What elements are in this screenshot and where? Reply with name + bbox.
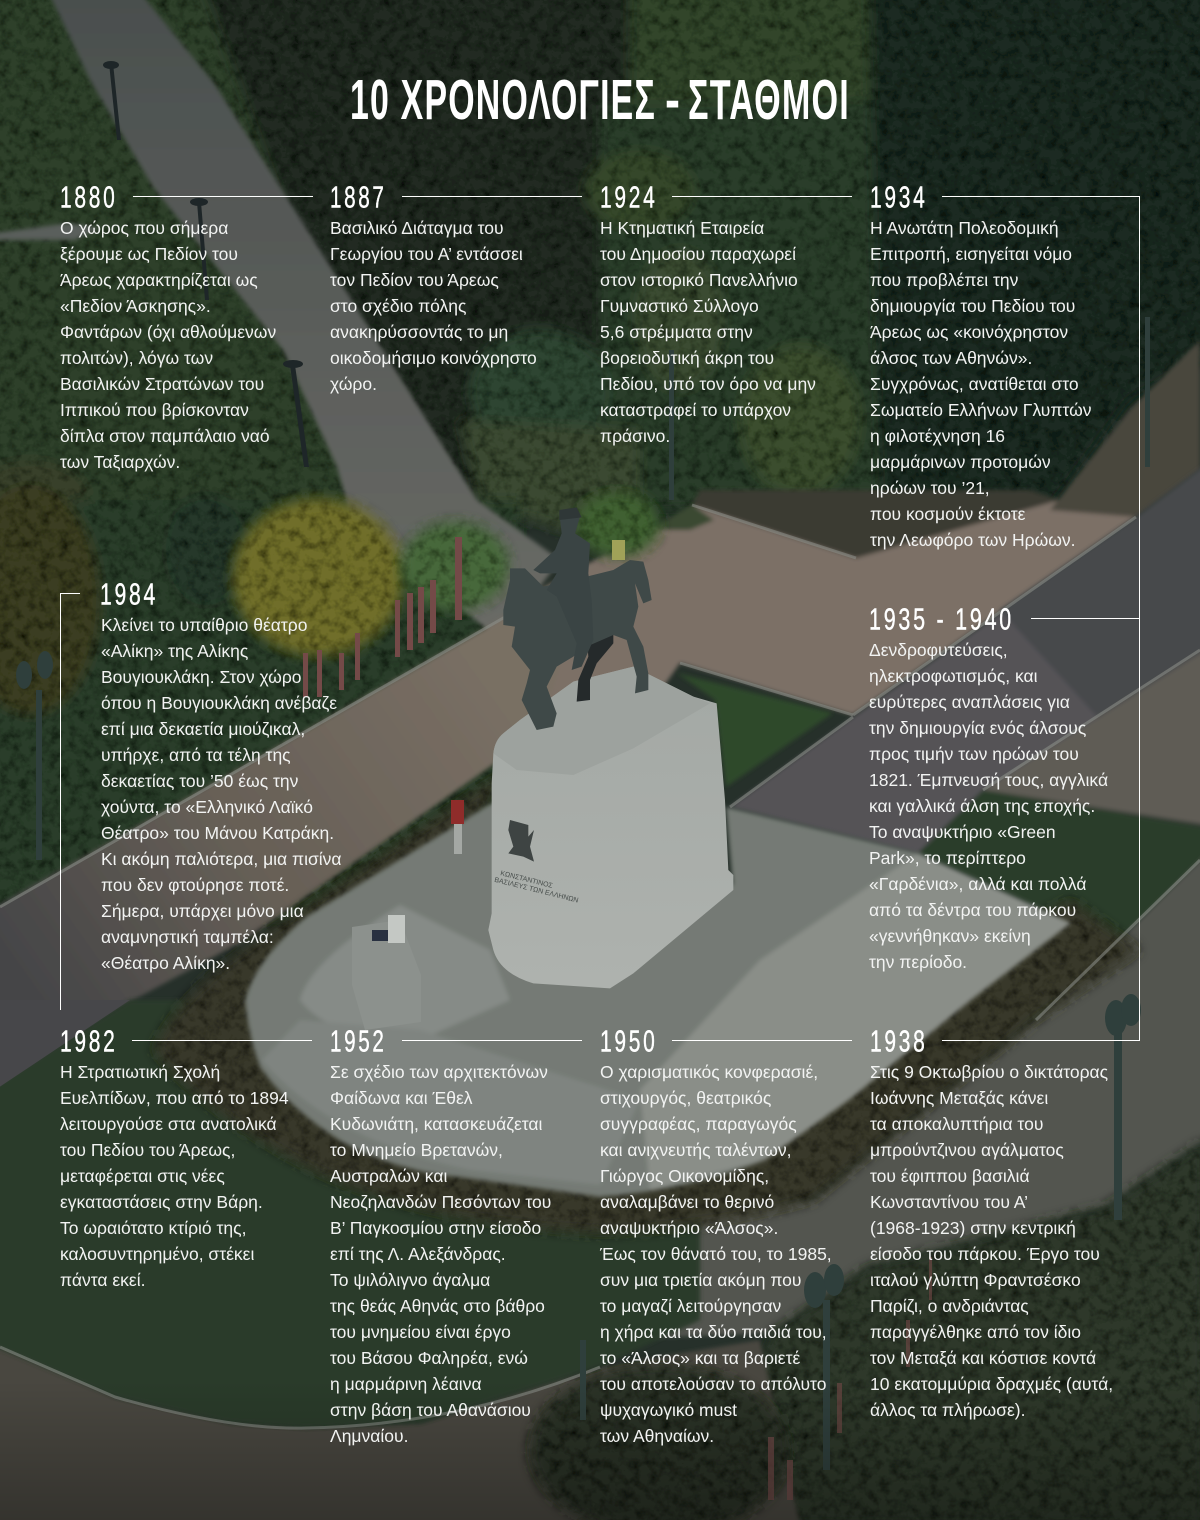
text: 1934: η φιλοτέχνηση 16 bbox=[870, 426, 1005, 446]
panel: 1924 bbox=[600, 180, 852, 446]
text: 1935 - 1940: Park», το περίπτερο bbox=[869, 848, 1026, 868]
text: 1950: το «Άλσος» και τα βαριετέ bbox=[600, 1348, 800, 1368]
emblem on plinth bbox=[508, 820, 534, 862]
equestrian statue bbox=[503, 507, 652, 730]
text: 1924 bbox=[600, 218, 816, 446]
text: 1950: των Αθηναίων. bbox=[600, 1426, 714, 1446]
text: 1887: Γεωργίου του Α’ εντάσσει bbox=[330, 244, 523, 264]
text: 1984: όπου η Βουγιουκλάκη ανέβαζε bbox=[101, 693, 337, 713]
panel: 1887 bbox=[330, 180, 582, 394]
text: 1924: Πεδίου, υπό τον όρο να μην bbox=[600, 374, 816, 394]
stone block with seated figures bbox=[352, 920, 421, 1030]
text: 1924: καταστραφεί το υπάρχον bbox=[600, 400, 791, 420]
text: 1982: Ευελπίδων, που από το 1894 bbox=[60, 1088, 289, 1108]
people on the plaza bbox=[372, 540, 625, 943]
title: ΣΤΑΘΜΟΙ bbox=[688, 68, 850, 132]
title: - bbox=[665, 68, 680, 132]
connector line bbox=[942, 1040, 1140, 1041]
text: 1887: στο σχέδιο πόλης bbox=[330, 296, 466, 316]
text: 1982: του Πεδίου του Άρεως, bbox=[60, 1140, 235, 1160]
text: 1982: Το ωραιότατο κτίριό της, bbox=[60, 1218, 246, 1238]
text: 1934: Συγχρόνως, ανατίθεται στο bbox=[870, 374, 1079, 394]
text: 1984: επί μια δεκαετία μιούζικαλ, bbox=[101, 719, 305, 739]
text: 1984: Σήμερα, υπάρχει μόνο μια bbox=[101, 901, 304, 921]
text: 1952: επί της Λ. Αλεξάνδρας. bbox=[330, 1244, 506, 1264]
green bushes bbox=[401, 493, 660, 610]
text: 1952 bbox=[330, 1062, 551, 1446]
text: 1880 bbox=[60, 218, 276, 472]
panel: 1938 bbox=[870, 1024, 1139, 1420]
text: 1952: η μαρμάρινη λέαινα bbox=[330, 1374, 482, 1394]
text: 1938: Ιωάννης Μεταξάς κάνει bbox=[870, 1088, 1048, 1108]
text: 1952: Φαίδωνα και Έθελ bbox=[330, 1088, 473, 1108]
text: 1950: ψυχαγωγικό must bbox=[600, 1400, 737, 1420]
year: 1880: 1880 bbox=[60, 180, 118, 214]
text: 1982: εγκαταστάσεις στην Βάρη. bbox=[60, 1192, 263, 1212]
text: 1950: συγγραφέας, παραγωγός bbox=[600, 1114, 797, 1134]
text: 1934: δημιουργία του Πεδίου του bbox=[870, 296, 1075, 316]
text: 1982 bbox=[60, 1062, 289, 1290]
text: 1934: μαρμάρινων προτομών bbox=[870, 452, 1051, 472]
year: 1924: 1924 bbox=[600, 180, 658, 214]
text: 1984: δεκαετίας του ’50 έως την bbox=[101, 771, 298, 791]
text: 1934 bbox=[870, 218, 1092, 550]
text: 1935 - 1940: 1821. Έμπνευσή τους, αγγλικά bbox=[869, 770, 1108, 790]
text: 1934: που κοσμούν έκτοτε bbox=[870, 504, 1025, 524]
text: 1887 bbox=[330, 218, 537, 394]
lower walkway bbox=[590, 855, 1200, 1340]
panel: 1880 bbox=[60, 180, 313, 472]
text: 1984 bbox=[101, 615, 342, 973]
year: 1938: 1938 bbox=[870, 1024, 928, 1058]
text: 1934: άλσος των Αθηνών». bbox=[870, 348, 1032, 368]
year: 1935 - 1940: 1935 - 1940 bbox=[869, 602, 1014, 636]
text: 1880: δίπλα στον παμπάλαιο ναό bbox=[60, 426, 270, 446]
text: 1950: αναλαμβάνει το θερινό bbox=[600, 1192, 774, 1212]
text: 1952: Β’ Παγκοσμίου στην είσοδο bbox=[330, 1218, 541, 1238]
text: 1935 - 1940: την περίοδο. bbox=[869, 952, 967, 972]
connector line bbox=[402, 196, 582, 197]
grass wedge beside the plinth bbox=[677, 673, 833, 787]
text: 1982: πάντα εκεί. bbox=[60, 1270, 145, 1290]
flower strip around the plaza bbox=[153, 770, 1140, 1233]
text: 1880: «Πεδίον Άσκησης». bbox=[60, 296, 211, 316]
text: 1887: οικοδομήσιμο κοινόχρηστο bbox=[330, 348, 537, 368]
text: 1935 - 1940: «Γαρδένια», αλλά και πολλά bbox=[869, 874, 1087, 894]
text: 1924: πράσινο. bbox=[600, 426, 670, 446]
text: 1952: Κυδωνιάτη, κατασκευάζεται bbox=[330, 1114, 542, 1134]
text: 1938: Στις 9 Οκτωβρίου ο δικτάτορας bbox=[870, 1062, 1108, 1082]
connector line bbox=[132, 1040, 312, 1041]
text: 1952: του μνημείου είναι έργο bbox=[330, 1322, 511, 1342]
text: 1938 bbox=[870, 1062, 1113, 1420]
text: 1938: τον Μεταξά και κόστισε κοντά bbox=[870, 1348, 1096, 1368]
text: 1984: Βουγιουκλάκη. Στον χώρο bbox=[101, 667, 302, 687]
text: 1950: του αποτελούσαν το απόλυτο bbox=[600, 1374, 826, 1394]
text: 1984: χούντα, το «Ελληνικό Λαϊκό bbox=[101, 797, 313, 817]
text: 1935 - 1940 bbox=[869, 640, 1108, 972]
text: 1982: λειτουργούσε στα ανατολικά bbox=[60, 1114, 277, 1134]
panel: 1950 bbox=[600, 1024, 852, 1446]
text: 1880: Βασιλικών Στρατώνων του bbox=[60, 374, 264, 394]
connector line bbox=[672, 1040, 852, 1041]
text: 1952: το Μνημείο Βρετανών, bbox=[330, 1140, 503, 1160]
text: 1950 bbox=[600, 1062, 832, 1446]
timeline connector: left bracket bbox=[60, 593, 61, 1010]
lower right lawn bbox=[690, 1140, 1200, 1520]
text: 1950: το μαγαζί λειτούργησαν bbox=[600, 1296, 781, 1316]
text: 1984: Θέατρο» του Μάνου Κατράκη. bbox=[101, 823, 334, 843]
sand square behind the statue bbox=[520, 340, 1200, 760]
text: 1982: καλοσυντηρημένο, στέκει bbox=[60, 1244, 254, 1264]
text: 1935 - 1940: ευρύτερες αναπλάσεις για bbox=[869, 692, 1070, 712]
text: 1984: Κλείνει το υπαίθριο θέατρο bbox=[101, 615, 308, 635]
text: 1984: αναμνηστική ταμπέλα: bbox=[101, 927, 274, 947]
text: 1938: του έφιππου βασιλιά bbox=[870, 1166, 1030, 1186]
text: 1924: 5,6 στρέμματα στην bbox=[600, 322, 753, 342]
text: 1935 - 1940: ηλεκτροφωτισμός, και bbox=[869, 666, 1038, 686]
text: 1935 - 1940: προς τιμήν των ηρώων του bbox=[869, 744, 1079, 764]
year: 1952: 1952 bbox=[330, 1024, 386, 1058]
text: 1952: Το ψιλόλιγνο άγαλμα bbox=[330, 1270, 490, 1290]
text: 1950: συν μια τριετία ακόμη που bbox=[600, 1270, 801, 1290]
text: 1934: την Λεωφόρο των Ηρώων. bbox=[870, 530, 1076, 550]
text: 1950: αναψυκτήριο «Άλσος». bbox=[600, 1218, 778, 1238]
panel: 1935 - 1940 bbox=[869, 602, 1139, 972]
text: 1935 - 1940: Δενδροφυτεύσεις, bbox=[869, 640, 1008, 660]
year: 1984: 1984 bbox=[100, 576, 158, 612]
foliage: trees and grass masses bbox=[0, 0, 1200, 920]
plinth inscription: ΚΩΝΣΤΑΝΤΙΝΟΣ bbox=[500, 870, 554, 890]
connector line bbox=[133, 196, 313, 197]
text: 1938: είσοδο του πάρκου. Έργο του bbox=[870, 1244, 1100, 1264]
text: 1950: Γιώργος Οικονομίδης, bbox=[600, 1166, 769, 1186]
text: 1887: Βασιλικό Διάταγμα του bbox=[330, 218, 504, 238]
text: 1938: άλλος τα πλήρωσε). bbox=[870, 1400, 1026, 1420]
text: 1938: 10 εκατομμύρια δραχμές (αυτά, bbox=[870, 1374, 1113, 1394]
connector line bbox=[672, 196, 852, 197]
timeline connector: right side vertical line bbox=[1139, 196, 1140, 1041]
panel: 1984 bbox=[60, 576, 342, 1010]
text: 1934: Σωματείο Ελλήνων Γλυπτών bbox=[870, 400, 1092, 420]
text: 1934: ηρώων του ’21, bbox=[870, 478, 990, 498]
connector line bbox=[1031, 618, 1140, 619]
text: 1982: μεταφέρεται στις νέες bbox=[60, 1166, 225, 1186]
text: 1887: χώρο. bbox=[330, 374, 377, 394]
text: 1952: Νεοζηλανδών Πεσόντων του bbox=[330, 1192, 551, 1212]
text: 1934: που προβλέπει την bbox=[870, 270, 1018, 290]
text: 1952: του Βάσου Φαληρέα, ενώ bbox=[330, 1348, 528, 1368]
text: 1952: Λημναίου. bbox=[330, 1426, 408, 1446]
bottom shading bbox=[0, 1380, 1200, 1520]
plinth inscription line 2: ΒΑΣΙΛΕΥΣ ΤΩΝ ΕΛΛΗΝΩΝ bbox=[494, 877, 579, 905]
text: 1924: βορειοδυτική άκρη του bbox=[600, 348, 774, 368]
text: 1887: τον Πεδίον του Άρεως bbox=[330, 270, 499, 290]
curbs along roads and paths bbox=[0, 505, 1200, 1428]
text: 1887: ανακηρύσσοντάς το μη bbox=[330, 322, 508, 342]
year: 1934: 1934 bbox=[870, 180, 928, 214]
text: 1938: μπρούντζινου αγάλματος bbox=[870, 1140, 1064, 1160]
text: 1938: τα αποκαλυπτήρια του bbox=[870, 1114, 1043, 1134]
text: 1938: Παρίζι, ο ανδριάντας bbox=[870, 1296, 1029, 1316]
year: 1887: 1887 bbox=[330, 180, 386, 214]
text: 1984: Κι ακόμη παλιότερα, μια πισίνα bbox=[101, 849, 342, 869]
text: 1880: των Ταξιαρχών. bbox=[60, 452, 180, 472]
connector line bbox=[942, 196, 1140, 197]
marble plaza around the monument bbox=[245, 803, 1071, 1197]
panel: 1952 bbox=[330, 1024, 582, 1446]
text: 1934: Η Ανωτάτη Πολεοδομική bbox=[870, 218, 1059, 238]
text: 1950: Έως τον θάνατό του, το 1985, bbox=[600, 1244, 832, 1264]
text: 1984: «Αλίκη» της Αλίκης bbox=[101, 641, 248, 661]
text: 1880: πολιτών), λόγω των bbox=[60, 348, 213, 368]
text: 1984: που δεν φτούρησε ποτέ. bbox=[101, 875, 289, 895]
bracket tick bbox=[60, 593, 80, 594]
text: 1950: Ο χαρισματικός κονφερασιέ, bbox=[600, 1062, 818, 1082]
text: 1924: Γυμναστικό Σύλλογο bbox=[600, 296, 759, 316]
text: 1950: η χήρα και τα δύο παιδιά του, bbox=[600, 1322, 827, 1342]
text: 1935 - 1940: και γαλλικά άλση της εποχής. bbox=[869, 796, 1095, 816]
red fence posts bbox=[303, 537, 932, 1500]
text: 1952: στην βάση του Αθανάσιου bbox=[330, 1400, 531, 1420]
text: 1938: Κωνσταντίνου του Α’ bbox=[870, 1192, 1028, 1212]
text: 1934: Επιτροπή, εισηγείται νόμο bbox=[870, 244, 1072, 264]
panel: 1982 bbox=[60, 1024, 312, 1290]
text: 1950: στιχουργός, θεατρικός bbox=[600, 1088, 771, 1108]
text: 1924: στον ιστορικό Πανελλήνιο bbox=[600, 270, 798, 290]
text: 1952: Αυστραλών και bbox=[330, 1166, 447, 1186]
panel: 1934 bbox=[870, 180, 1139, 550]
year: 1982: 1982 bbox=[60, 1024, 118, 1058]
text: 1934: Άρεως ως «κοινόχρηστον bbox=[870, 322, 1068, 342]
yellow-green tree bbox=[233, 499, 403, 655]
text: 1935 - 1940: Το αναψυκτήριο «Green bbox=[869, 822, 1056, 842]
text: 1952: της θεάς Αθηνάς στο βάθρο bbox=[330, 1296, 545, 1316]
monument plinth bbox=[488, 667, 733, 988]
text: 1938: ιταλού γλύπτη Φραντσέσκο bbox=[870, 1270, 1081, 1290]
text: 1924: Η Κτηματική Εταιρεία bbox=[600, 218, 764, 238]
text: 1984: υπήρχε, από τα τέλη της bbox=[101, 745, 291, 765]
text: 1938: (1968-1923) στην κεντρική bbox=[870, 1218, 1076, 1238]
text: 1880: Φαντάρων (όχι αθλούμενων bbox=[60, 322, 276, 342]
title: 10 ΧΡΟΝΟΛΟΓΙΕΣ bbox=[350, 68, 656, 132]
tree-lined main path bbox=[0, 0, 560, 640]
avenue road running to the left bbox=[0, 617, 570, 1090]
text: 1984: «Θέατρο Αλίκη». bbox=[101, 953, 230, 973]
lower left lawn and sand path bbox=[0, 1000, 800, 1520]
text: 1880: Ιππικού που βρίσκονταν bbox=[60, 400, 249, 420]
text: 1880: ξέρουμε ως Πεδίον του bbox=[60, 244, 238, 264]
text: 1880: Ο χώρος που σήμερα bbox=[60, 218, 228, 238]
year: 1950: 1950 bbox=[600, 1024, 658, 1058]
connector line bbox=[402, 1040, 582, 1041]
text: 1924: του Δημοσίου παραχωρεί bbox=[600, 244, 796, 264]
text: 1982: Η Στρατιωτική Σχολή bbox=[60, 1062, 220, 1082]
text: 1950: και ανιχνευτής ταλέντων, bbox=[600, 1140, 791, 1160]
text: 1935 - 1940: την δημιουργία ενός άλσους bbox=[869, 718, 1086, 738]
text: 1880: Άρεως χαρακτηρίζεται ως bbox=[60, 270, 258, 290]
text: 1938: παραγγέλθηκε από τον ίδιο bbox=[870, 1322, 1081, 1342]
text: 1952: Σε σχέδιο των αρχιτεκτόνων bbox=[330, 1062, 548, 1082]
cobbled paving and side paths bbox=[730, 465, 1200, 1020]
text: 1935 - 1940: «γεννήθηκαν» εκείνη bbox=[869, 926, 1031, 946]
text: 1935 - 1940: από τα δέντρα του πάρκου bbox=[869, 900, 1076, 920]
